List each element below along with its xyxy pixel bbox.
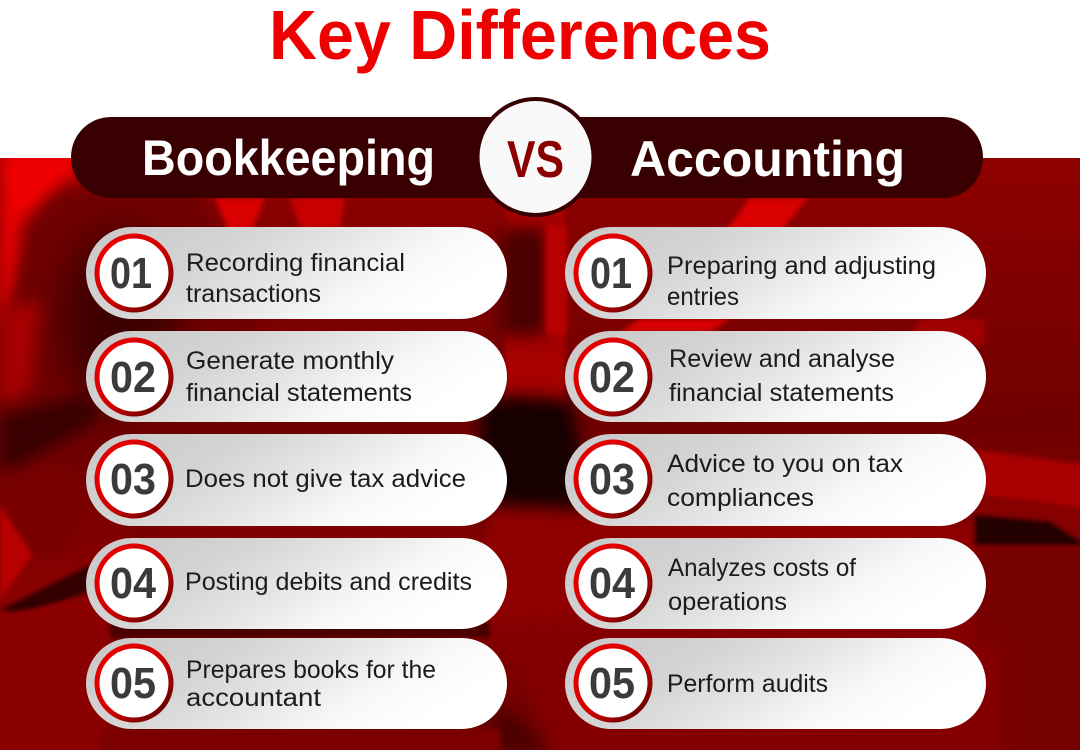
item 03 (86, 434, 507, 526)
item 02: 02 (589, 353, 635, 402)
item 01: 01 (110, 249, 152, 298)
item 01 (86, 227, 507, 319)
item 02: 02 (110, 353, 156, 402)
item 04 (565, 538, 986, 629)
item 05: 05 (589, 659, 635, 708)
header banner (71, 97, 983, 217)
item 05 (565, 638, 986, 729)
item 02 (86, 331, 507, 422)
item 01: transactions (186, 280, 321, 308)
VS badge: VS (507, 131, 564, 189)
item 04 (86, 538, 507, 629)
item 02: Generate monthly (186, 347, 395, 375)
item 05: 05 (110, 659, 156, 708)
item 03: compliances (667, 484, 814, 512)
item 05: Prepares books for the (186, 656, 436, 684)
item 01 (565, 227, 986, 319)
item 03: Does not give tax advice (185, 465, 466, 493)
VS badge (476, 97, 596, 217)
item 02 (565, 331, 986, 422)
item 04: 04 (110, 559, 156, 608)
red photo background (0, 150, 1080, 750)
item 04: operations (668, 588, 787, 616)
item 02: Review and analyse (669, 345, 895, 373)
panel: accounting list (565, 227, 986, 729)
item 01: Preparing and adjusting (667, 252, 936, 280)
item 02: financial statements (669, 379, 894, 407)
item 05 (86, 638, 507, 729)
item 05: Perform audits (667, 670, 828, 698)
item 03: 03 (589, 455, 635, 504)
item 02: financial statements (186, 379, 412, 407)
item 04: Analyzes costs of (668, 554, 856, 582)
item 01: 01 (590, 249, 632, 298)
item 03: Advice to you on tax (667, 450, 904, 478)
heading: Accounting: Accounting (630, 131, 905, 187)
item 04: Posting debits and credits (185, 568, 472, 596)
heading: Bookkeeping: Bookkeeping (142, 130, 435, 186)
item 01: entries (667, 283, 739, 311)
item 03: 03 (110, 455, 156, 504)
item 03 (565, 434, 986, 526)
banner bar (71, 117, 983, 198)
item 01: Recording financial (186, 249, 405, 277)
panel: bookkeeping list (86, 227, 507, 729)
item 04: 04 (589, 559, 635, 608)
item 05: accountant (186, 684, 321, 712)
